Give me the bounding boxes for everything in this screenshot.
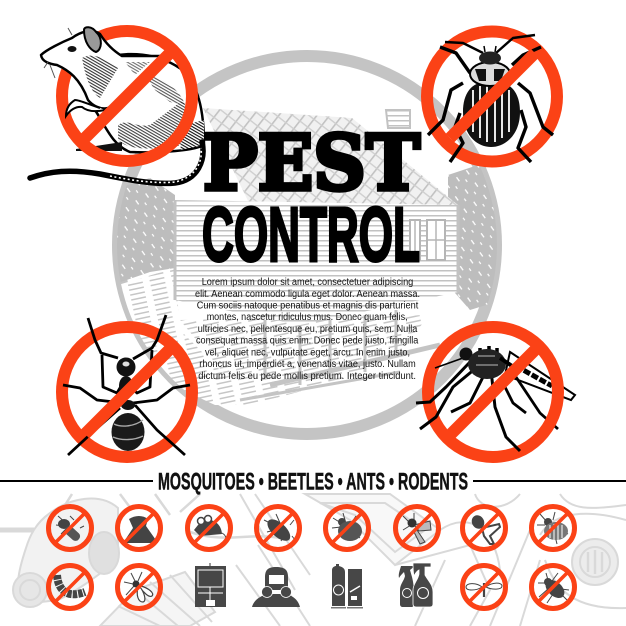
- icon: wasp: [462, 506, 506, 550]
- icon: mole hill: [118, 506, 160, 550]
- body text: [195, 277, 420, 382]
- icon: mosquito small: [462, 566, 506, 608]
- body text: vel, aliquet nec, vulputate eget, arcu. In enim justo,: [205, 348, 410, 358]
- icon: winged ant: [118, 566, 160, 608]
- chimney: [386, 110, 410, 128]
- right trees: [448, 166, 494, 310]
- icon: larva: [48, 566, 92, 608]
- body text: rhoncus ut, imperdiet a, venenatis vitae, justo. Nullam: [199, 359, 416, 370]
- icon: aerosol cans: [331, 564, 363, 608]
- ground: [118, 268, 255, 405]
- icon: ground beetle: [532, 566, 574, 608]
- background: grey circle with house sketch: [112, 56, 502, 434]
- beetle ban sign: [427, 32, 557, 162]
- rodent ban sign: [30, 27, 204, 183]
- body text: montes, nascetur ridiculus mus. Donec quam felis,: [207, 312, 408, 323]
- ant: [63, 315, 190, 455]
- title: CONTROL: CONTROL: [202, 192, 420, 278]
- mosquito ban sign: [416, 327, 575, 457]
- roof: [203, 108, 458, 205]
- heading rule: right: [473, 480, 626, 482]
- icon: spray bottles: [399, 563, 433, 607]
- porch: [265, 310, 396, 385]
- body text: Cum sociis natoque penatibus et magnis dis parturient: [197, 300, 419, 312]
- icon: mouse trap: [195, 563, 226, 607]
- slash: [85, 53, 170, 138]
- icon: mouse: [188, 506, 230, 550]
- icon: bed bug: [326, 506, 368, 550]
- icon: termite: [48, 506, 92, 550]
- body text: dictum felis eu pede mollis pretium. Integer tincidunt.: [198, 371, 416, 382]
- left trees: [117, 178, 175, 280]
- icon: fly: [396, 506, 438, 550]
- icon: protective suit: [252, 567, 300, 607]
- icon: striped beetle: [532, 506, 574, 550]
- body text: ultricies nec, pellentesque eu, pretium quis, sem. Nulla: [198, 324, 418, 335]
- mosquito wing: [505, 352, 575, 429]
- body text: Lorem ipsum dolor sit amet, consectetuer adipiscing: [202, 277, 413, 288]
- red ring: [62, 31, 192, 161]
- windows: [410, 220, 445, 260]
- title: PEST: PEST: [203, 118, 420, 208]
- rat body and tail: [30, 54, 204, 183]
- beetle: [428, 35, 553, 162]
- body text: consequat massa quis enim. Donec pede justo, fringilla: [196, 336, 419, 347]
- walls: [175, 200, 458, 325]
- body text: elit. Aenean commodo ligula eget dolor. Aenean massa.: [195, 289, 420, 300]
- heading rule: left: [0, 480, 153, 482]
- background sketch: masks and sprays: [0, 494, 626, 626]
- mosquito: [416, 346, 520, 451]
- icon: cockroach: [256, 506, 300, 550]
- ant ban sign: [62, 315, 192, 457]
- rat head and arm: [41, 27, 165, 116]
